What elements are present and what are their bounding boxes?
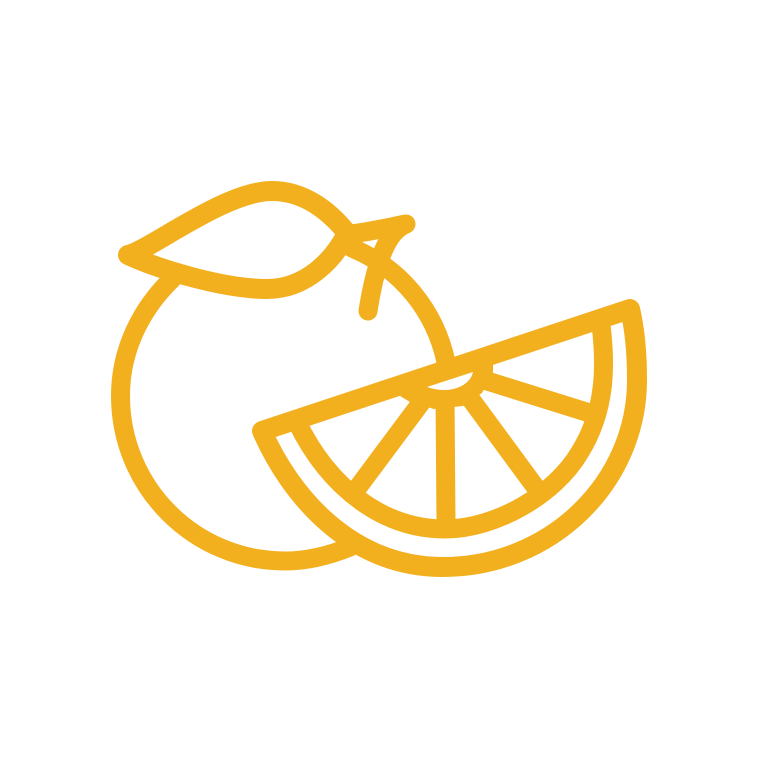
slice inner arc — [297, 325, 604, 529]
leaf — [128, 191, 347, 289]
stem — [350, 224, 406, 311]
orange top right arc — [352, 248, 446, 362]
slice centre hub — [400, 362, 493, 409]
segment spoke far right — [484, 380, 596, 415]
orange body outline — [120, 279, 350, 561]
segment spoke centre — [445, 396, 446, 522]
segment spoke right — [467, 394, 539, 492]
segment spoke left — [356, 396, 426, 490]
slice centre sliver — [427, 372, 473, 390]
slice outer rind — [262, 309, 637, 567]
